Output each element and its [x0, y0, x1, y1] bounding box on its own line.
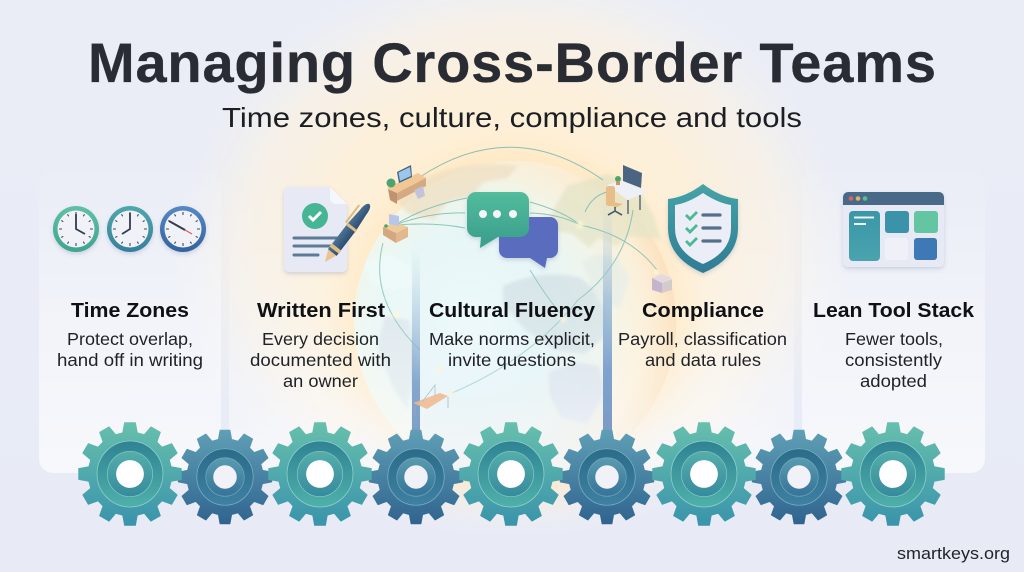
text: cultural fluency	[429, 300, 596, 370]
panel: compliance	[612, 170, 794, 473]
icon: desk top right	[606, 165, 647, 215]
icon: desk lower left	[383, 214, 408, 243]
text: written first: Written First	[257, 300, 385, 322]
icon: desk top left	[386, 165, 426, 204]
icon: desk small right	[652, 270, 672, 293]
text: cultural fluency: Cultural Fluency	[429, 300, 596, 322]
text: compliance	[618, 300, 787, 370]
icon: chat bubbles	[467, 192, 558, 268]
panel: cultural fluency	[420, 170, 603, 473]
icon: clocks	[53, 206, 206, 252]
text: lean tool stack: adopted	[860, 371, 927, 391]
text: written first: Every decision	[262, 329, 379, 349]
panel: lean tool stack	[802, 170, 985, 473]
globe with connection arcs	[343, 147, 687, 494]
text: cultural fluency: Make norms explicit,	[429, 329, 595, 349]
divider column left	[412, 250, 420, 440]
text: compliance: Compliance	[642, 300, 764, 322]
icon: document and pen	[284, 187, 374, 272]
text: compliance: and data rules	[645, 350, 761, 370]
text: written first	[250, 300, 391, 391]
text: time zones: hand off in writing	[57, 350, 203, 370]
text: compliance: Payroll, classification	[618, 329, 787, 349]
icon: desk bottom center	[413, 385, 448, 415]
text: time zones: Time Zones	[71, 300, 189, 322]
text: lean tool stack: consistently	[845, 350, 942, 370]
text: time zones	[57, 300, 203, 370]
icon: shield	[668, 184, 738, 273]
subtitle: Time zones, culture, compliance and tools	[222, 102, 802, 133]
icon: app window	[843, 192, 944, 267]
text: time zones: Protect overlap,	[67, 329, 193, 349]
title: Managing Cross-Border Teams	[88, 31, 936, 94]
panel: time zones	[39, 170, 221, 473]
text: written first: an owner	[283, 371, 358, 391]
panel: written first	[229, 170, 411, 473]
text: cultural fluency: invite questions	[448, 350, 576, 370]
text: written first: documented with	[250, 350, 391, 370]
text: lean tool stack: Fewer tools,	[845, 329, 943, 349]
text: lean tool stack: Lean Tool Stack	[813, 300, 975, 322]
globe bottom fade	[355, 390, 675, 480]
divider column right	[603, 205, 612, 440]
footer website: smartkeys.org	[897, 544, 1010, 563]
gear row	[79, 423, 944, 525]
text: lean tool stack	[813, 300, 975, 391]
